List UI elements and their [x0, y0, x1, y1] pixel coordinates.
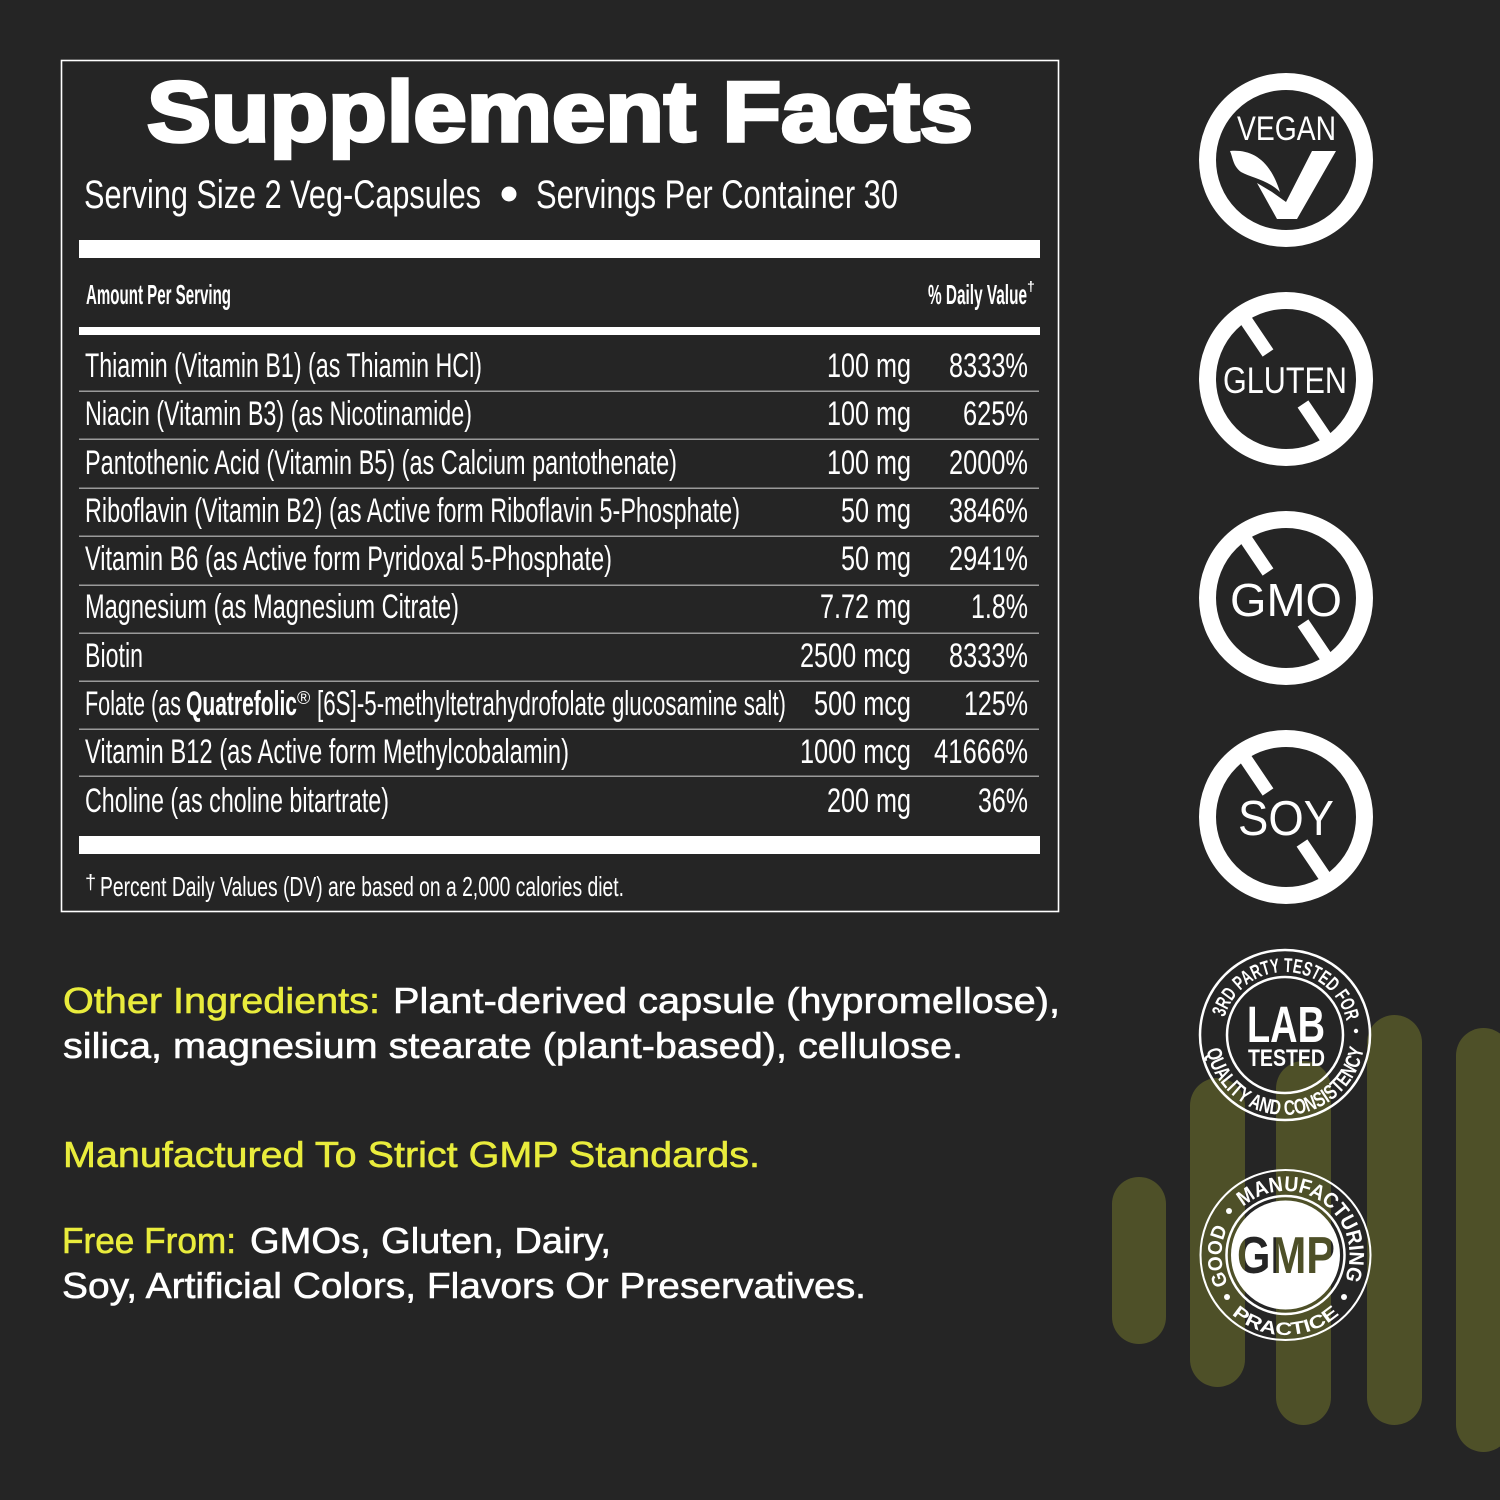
row: choline: 200 mg — [827, 782, 911, 820]
other ingredients text: silica, magnesium stearate (plant-based), cellulose. — [63, 1025, 963, 1066]
row: niacin — [85, 395, 1028, 433]
row: vitamin b12: Vitamin B12 (as Active form Methylcobalamin) — [85, 733, 569, 771]
row dividers — [79, 390, 1039, 777]
row: pantothenic acid: 100 mg — [827, 444, 911, 482]
row: biotin — [85, 637, 1028, 675]
free from text: Free From: — [62, 1220, 236, 1261]
title: Supplement Facts — [147, 65, 973, 160]
icon: no soy: SOY — [1238, 792, 1334, 846]
lab wording — [1247, 996, 1325, 1072]
gmp standards text: Manufactured To Strict GMP Standards. — [63, 1134, 760, 1175]
other ingredients text — [63, 980, 1060, 1066]
lab curved text: QUALITY AND CONSISTENCY — [1204, 1046, 1363, 1115]
gmp curved text: GOOD — [1208, 1226, 1226, 1287]
gmp curved text — [1208, 1176, 1364, 1336]
panel: supplement facts — [62, 60, 1058, 912]
icon: vegan: VEGAN — [1237, 110, 1336, 148]
row: folate: Folate (as — [85, 685, 181, 723]
row: niacin: Niacin (Vitamin B3) (as Nicotinamide) — [85, 395, 472, 433]
serving info: Servings Per Container 30 — [536, 173, 898, 217]
row: folate: [6S]-5-methyltetrahydrofolate glucosamine salt) — [317, 685, 786, 723]
table header — [86, 278, 1035, 310]
other ingredients text: Other Ingredients: — [63, 980, 380, 1021]
row: folate: ® — [297, 688, 310, 708]
row: pantothenic acid: 2000% — [949, 444, 1028, 482]
row: riboflavin: 3846% — [949, 492, 1028, 530]
row: choline: 36% — [978, 782, 1028, 820]
row: niacin: 100 mg — [827, 395, 911, 433]
row: thiamin: Thiamin (Vitamin B1) (as Thiamin HCl) — [85, 347, 482, 385]
row: niacin: 625% — [963, 395, 1028, 433]
row: biotin: Biotin — [85, 637, 143, 675]
other ingredients text: Plant-derived capsule (hypromellose), — [393, 980, 1060, 1021]
footnote: Percent Daily Values (DV) are based on a 2,000 calories diet. — [100, 871, 624, 902]
icon: vegan — [1208, 82, 1364, 238]
row: vitamin b12: 1000 mcg — [800, 733, 911, 771]
free from text — [62, 1220, 866, 1306]
row: vitamin b6: 2941% — [949, 540, 1028, 578]
row: biotin: 2500 mcg — [800, 637, 911, 675]
badge: gmp — [1200, 1169, 1372, 1341]
serving info — [84, 173, 898, 217]
lab curved text — [1204, 958, 1363, 1115]
footnote: † — [85, 872, 96, 894]
decorative olive bars — [1112, 1015, 1500, 1452]
row: magnesium: 1.8% — [971, 588, 1028, 626]
row: magnesium: 7.72 mg — [820, 588, 911, 626]
icon: no gmo: GMO — [1230, 574, 1342, 626]
gmp disc — [1231, 1200, 1340, 1310]
row: folate: Quatrefolic — [186, 685, 297, 723]
serving info: Serving Size 2 Veg-Capsules — [84, 173, 481, 217]
row: pantothenic acid: Pantothenic Acid (Vitamin B5) (as Calcium pantothenate) — [85, 444, 677, 482]
row: biotin: 8333% — [949, 637, 1028, 675]
lab wording: LAB — [1247, 996, 1325, 1053]
row: magnesium: Magnesium (as Magnesium Citrate) — [85, 588, 459, 626]
row: thiamin: 8333% — [949, 347, 1028, 385]
row: thiamin: 100 mg — [827, 347, 911, 385]
footnote — [85, 871, 624, 902]
table header: Amount Per Serving — [86, 279, 231, 310]
row: choline — [85, 782, 1028, 820]
free from text: GMOs, Gluten, Dairy, — [250, 1220, 611, 1261]
row: folate: 500 mcg — [814, 685, 911, 723]
icon: no gmo — [1208, 520, 1364, 676]
icon: no gluten: GLUTEN — [1223, 360, 1347, 401]
row: thiamin — [85, 347, 1028, 385]
icon: no gluten — [1208, 300, 1364, 458]
gmp curved text: PRACTICE — [1232, 1305, 1339, 1336]
row: vitamin b12: 41666% — [934, 733, 1028, 771]
badge: lab tested — [1198, 948, 1372, 1122]
row: vitamin b6: 50 mg — [841, 540, 911, 578]
lab wording: TESTED — [1248, 1045, 1325, 1072]
gmp curved text: MANUFACTURING — [1236, 1176, 1364, 1282]
table header: † — [1027, 278, 1035, 294]
row: magnesium — [85, 588, 1028, 626]
row: vitamin b6: Vitamin B6 (as Active form Pyridoxal 5-Phosphate) — [85, 540, 612, 578]
row: riboflavin: 50 mg — [841, 492, 911, 530]
free from text: Soy, Artificial Colors, Flavors Or Preservatives. — [62, 1265, 866, 1306]
icon: no soy — [1208, 738, 1364, 896]
row: folate: 125% — [964, 685, 1028, 723]
row: riboflavin: Riboflavin (Vitamin B2) (as Active form Riboflavin 5-Phosphate) — [85, 492, 740, 530]
row: choline: Choline (as choline bitartrate) — [85, 782, 389, 820]
table header: % Daily Value — [928, 279, 1027, 310]
lab curved text: 3RD PARTY TESTED FOR — [1212, 958, 1359, 1021]
